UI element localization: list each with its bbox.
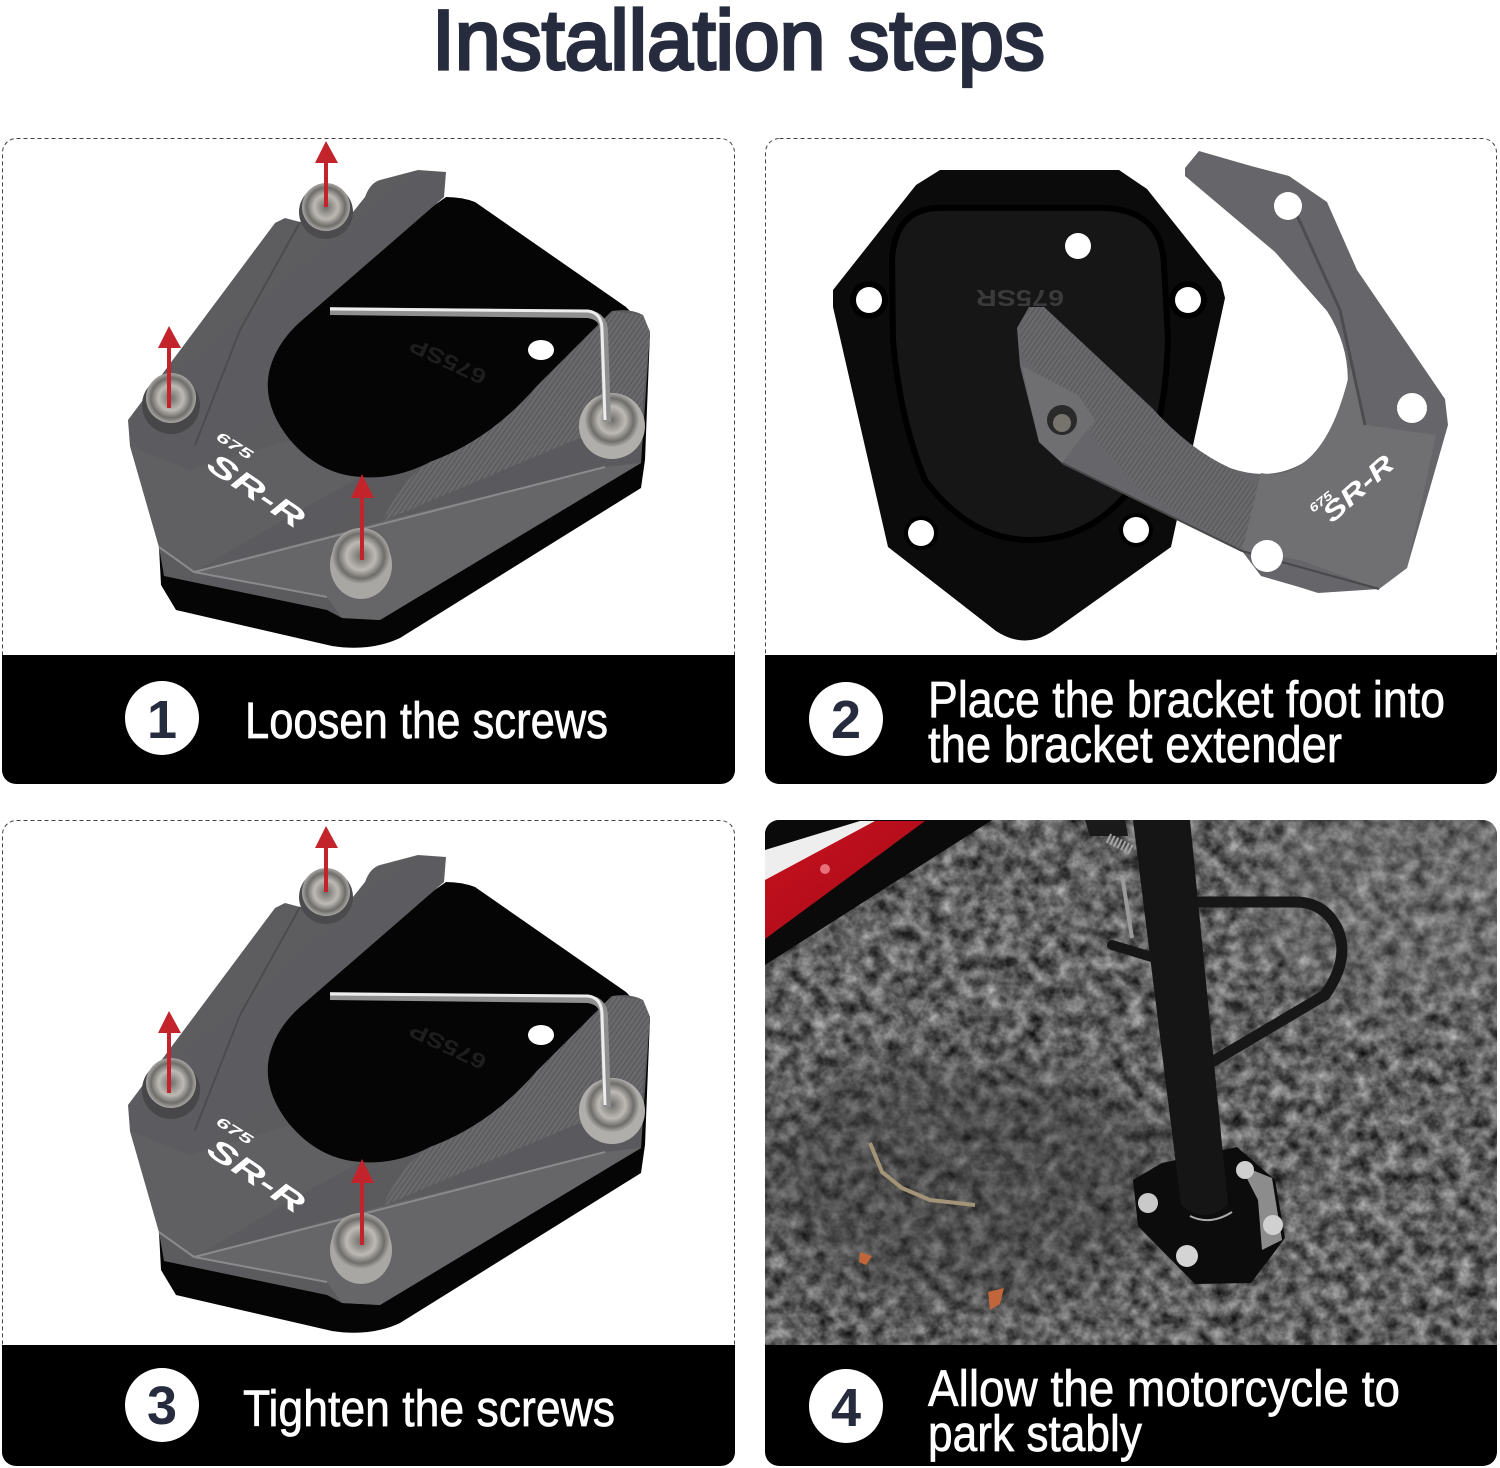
step number 4 [809, 1369, 883, 1443]
step number 1 [125, 681, 199, 755]
stand loop [1195, 902, 1342, 1062]
step 4 text: Allow the motorcycle to [928, 1360, 1400, 1417]
moulded text on base: 675SP [406, 1018, 490, 1073]
caption band [765, 1345, 1497, 1466]
dashed card outline [2, 820, 734, 1466]
step number 2 [809, 682, 883, 756]
step number 2: 2 [831, 690, 861, 750]
dashed card outline [2, 138, 734, 784]
step 4 text: park stably [928, 1405, 1142, 1462]
product image: bracket plate with hex key [128, 170, 650, 648]
logo on plate: SR-R [201, 447, 310, 535]
leaf spots [859, 1252, 1004, 1310]
step number 1: 1 [147, 690, 177, 750]
moulded text on base: 675SP [406, 333, 490, 388]
tube collar [1190, 1212, 1232, 1220]
step 2 text: the bracket extender [928, 716, 1342, 773]
logo on bracket [1306, 448, 1400, 528]
logo on bracket: 675 [1306, 488, 1336, 515]
caption band [765, 655, 1497, 784]
step 4 text [928, 1360, 1400, 1462]
black extender plate [833, 170, 1225, 640]
logo on plate: SR-R [201, 1132, 310, 1220]
logo on plate [201, 428, 310, 535]
spring and rod [1085, 820, 1155, 958]
red arrows: screws out [158, 141, 374, 560]
twig [870, 1143, 975, 1205]
product image: bracket plate with hex key [128, 855, 650, 1333]
step 3 text: Tighten the screws [243, 1380, 615, 1437]
photo: stand on asphalt [750, 790, 1500, 1345]
step number 4: 4 [831, 1378, 861, 1438]
grey bracket [1017, 151, 1448, 593]
panel: step 2 [765, 138, 1497, 784]
moulded text: 675SR [976, 285, 1064, 311]
caption band [2, 1345, 735, 1466]
step 2 text [928, 671, 1445, 773]
caption band [2, 655, 735, 784]
step 1 text: Loosen the screws [245, 692, 608, 749]
step number 3 [125, 1368, 199, 1442]
logo on bracket: SR-R [1316, 448, 1400, 528]
logo on plate: 675 [213, 428, 256, 463]
red arrows: screws in [158, 826, 374, 1245]
red fairing [765, 820, 992, 965]
foot pad [1133, 1147, 1285, 1284]
logo on plate: 675 [213, 1113, 256, 1148]
panel: step 1 [2, 138, 735, 784]
stand tube [1133, 820, 1228, 1215]
step number 3: 3 [147, 1376, 177, 1436]
dashed card outline [766, 138, 1496, 784]
panel: step 3 [2, 820, 735, 1466]
panel: step 4 [750, 790, 1500, 1466]
step 2 text: Place the bracket foot into [928, 671, 1445, 728]
logo on plate [201, 1113, 310, 1220]
